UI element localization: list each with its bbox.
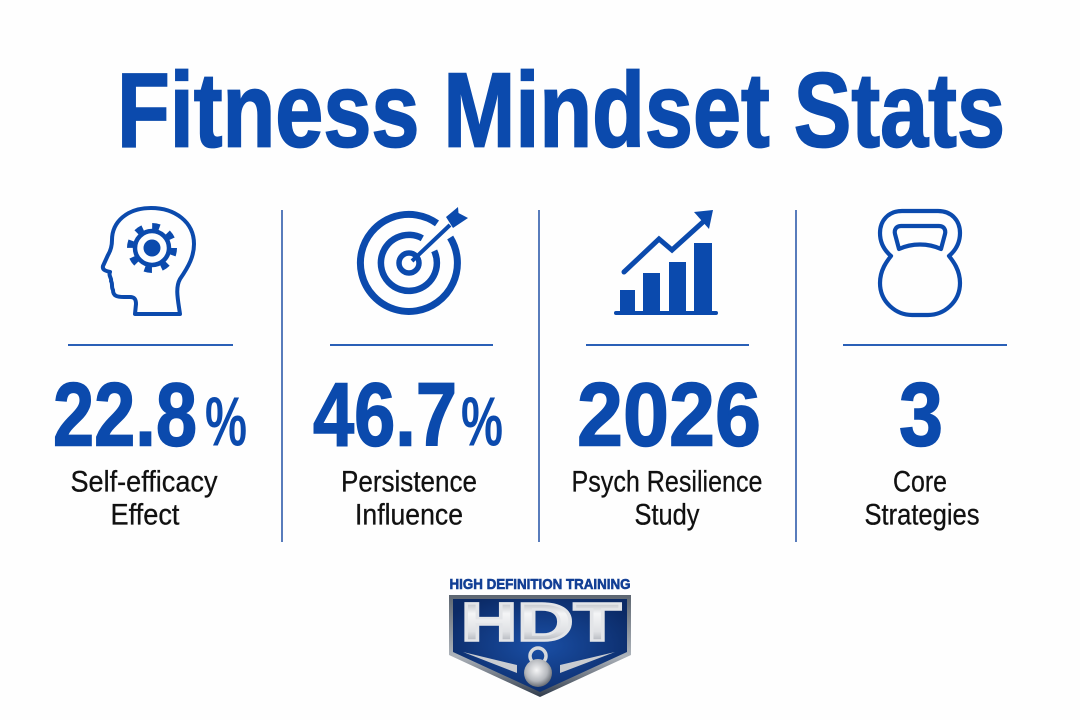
rule (330, 344, 493, 346)
stat label: Influence (355, 498, 463, 532)
stat value: % (205, 382, 247, 460)
stat label (341, 466, 477, 532)
icon: head with gear (103, 208, 194, 314)
logo kettlebell (530, 648, 546, 664)
column dividers (282, 210, 796, 542)
stat label: Core (893, 466, 947, 498)
stat label (70, 466, 218, 532)
stat label: Strategies (864, 498, 980, 532)
logo side blades (463, 652, 517, 673)
icon: kettlebell (880, 211, 960, 315)
logo letters: HDT (461, 592, 621, 652)
panel: study (572, 210, 762, 532)
stat label: Psych Resilience (572, 466, 762, 498)
rule (586, 344, 749, 346)
stat label (572, 466, 762, 532)
logo tagline: HIGH DEFINITION TRAINING (450, 577, 630, 593)
logo: HDT (449, 577, 631, 697)
logo shield (449, 595, 631, 697)
icon: target with arrow (360, 207, 468, 311)
stat label: Persistence (341, 466, 477, 498)
panel: persistence (313, 207, 503, 532)
stat label: Effect (110, 498, 180, 532)
rule (68, 344, 233, 346)
stat label (864, 466, 980, 532)
icon: bar chart with arrow (614, 210, 718, 315)
stat value: 46.7 (313, 366, 457, 466)
stat label: Self-efficacy (70, 466, 218, 498)
stat value: 22.8 (53, 366, 197, 466)
stat value: 3 (899, 366, 943, 466)
stat value: % (461, 382, 503, 460)
stat value: 2026 (577, 366, 761, 466)
panel: strategies (843, 211, 1007, 532)
stat label: Study (634, 498, 700, 532)
rule (843, 344, 1007, 346)
panel: self-efficacy (53, 208, 247, 532)
